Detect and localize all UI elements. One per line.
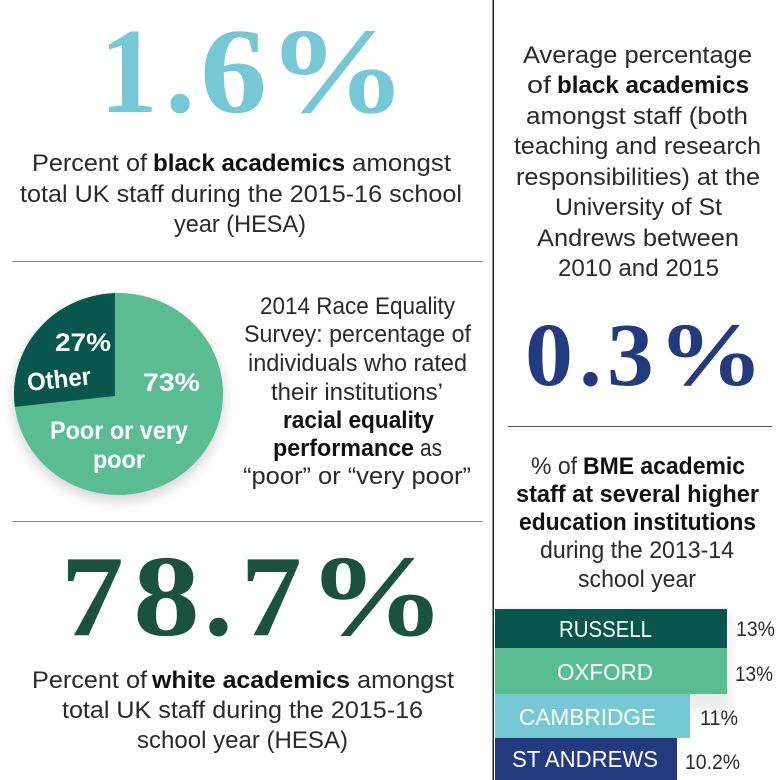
text: race equality survey description [243, 293, 471, 490]
label: Poor or very poor: poor [93, 446, 145, 474]
bar: Oxford: 13% [735, 663, 773, 686]
statistic: 1.6%: 6 [200, 4, 267, 139]
text: black academics UK: black academics [153, 150, 345, 177]
heading: BME academic staff: staff at several higher [516, 481, 759, 508]
text: race equality survey description: racial equality [283, 407, 435, 434]
bar chart: BME staff by institution [495, 609, 775, 780]
statistic: 0.3% [525, 306, 764, 405]
text: white academics UK: total UK staff during the 2015-16 [62, 697, 423, 724]
bar: St Andrews [495, 738, 740, 780]
statistic: 78.7%: 7 [241, 533, 302, 661]
text: St Andrews average: University of St [555, 194, 722, 221]
bar: Oxford [495, 648, 773, 694]
text: black academics UK [20, 150, 462, 238]
text: St Andrews average: black academics [557, 72, 749, 99]
text: race equality survey description: Survey: percentage of [244, 321, 471, 348]
heading: BME academic staff: during the 2013-14 [540, 537, 734, 564]
text: St Andrews average: Andrews between [537, 225, 739, 252]
bar: Oxford: OXFORD [557, 659, 653, 685]
text: race equality survey description: individuals who rated [248, 350, 467, 377]
heading: BME academic staff: education institutions [519, 509, 756, 536]
statistic: 78.7%: % [307, 533, 446, 661]
statistic: 78.7% [61, 533, 446, 661]
bar: Cambridge: CAMBRIDGE [519, 704, 656, 730]
bar: Cambridge [495, 694, 738, 738]
text: white academics UK: amongst [357, 667, 454, 694]
text: black academics UK: total UK staff during the 2015-16 school [20, 181, 462, 208]
statistic: 0.3%: 0 [525, 306, 573, 405]
statistic: 1.6%: 1 [100, 4, 158, 139]
text: race equality survey description: performance [273, 435, 414, 462]
statistic: 78.7%: . [204, 533, 232, 661]
text: white academics UK [32, 667, 454, 754]
bar: Cambridge: 11% [700, 707, 738, 730]
label: Other: Other [26, 362, 93, 397]
text: white academics UK: school year (HESA) [137, 727, 348, 754]
statistic: 0.3%: 3 [607, 306, 654, 405]
label: Poor or very poor [50, 417, 188, 474]
text: black academics UK: Percent of [32, 150, 147, 177]
text: white academics UK: Percent of [32, 667, 147, 694]
text: race equality survey description: as [420, 435, 442, 462]
text: race equality survey description: 2014 Race Equality [260, 293, 455, 320]
heading: BME academic staff: BME academic [583, 453, 745, 480]
statistic: 1.6%: . [165, 4, 195, 139]
text: white academics UK: white academics [151, 667, 350, 694]
text: St Andrews average [514, 42, 761, 282]
bar: Russell: RUSSELL [559, 616, 652, 642]
bar: St Andrews: ST ANDREWS [512, 746, 658, 772]
text: St Andrews average: of [527, 72, 551, 99]
heading: BME academic staff [516, 453, 759, 593]
statistic: 1.6% [100, 4, 407, 139]
text: St Andrews average: amongst staff (both [526, 103, 748, 130]
bar: St Andrews: 10.2% [685, 751, 740, 774]
text: St Andrews average: 2010 and 2015 [558, 255, 719, 282]
pie chart: race equality survey [5, 285, 224, 502]
text: St Andrews average: Average percentage [523, 42, 752, 69]
statistic: 0.3%: . [579, 306, 602, 405]
text: St Andrews average: teaching and research [514, 133, 761, 160]
bar: Russell [495, 609, 775, 648]
statistic: 1.6%: % [267, 4, 407, 139]
heading: BME academic staff: school year [578, 566, 696, 593]
text: race equality survey description: their institutions’ [271, 379, 443, 406]
statistic: 78.7%: 8 [133, 533, 200, 661]
text: black academics UK: amongst [352, 150, 451, 177]
text: St Andrews average: responsibilities) at the [516, 164, 760, 191]
text: race equality survey description: “poor” or “very poor” [243, 463, 471, 490]
text: black academics UK: year (HESA) [174, 211, 306, 238]
statistic: 78.7%: 7 [61, 533, 124, 661]
statistic: 0.3%: % [658, 306, 764, 405]
label: Poor or very poor: Poor or very [50, 417, 188, 445]
heading: BME academic staff: % of [531, 453, 577, 480]
label: 73%: 73% [143, 369, 200, 397]
label: 27%: 27% [55, 329, 111, 357]
bar: Russell: 13% [736, 618, 775, 641]
